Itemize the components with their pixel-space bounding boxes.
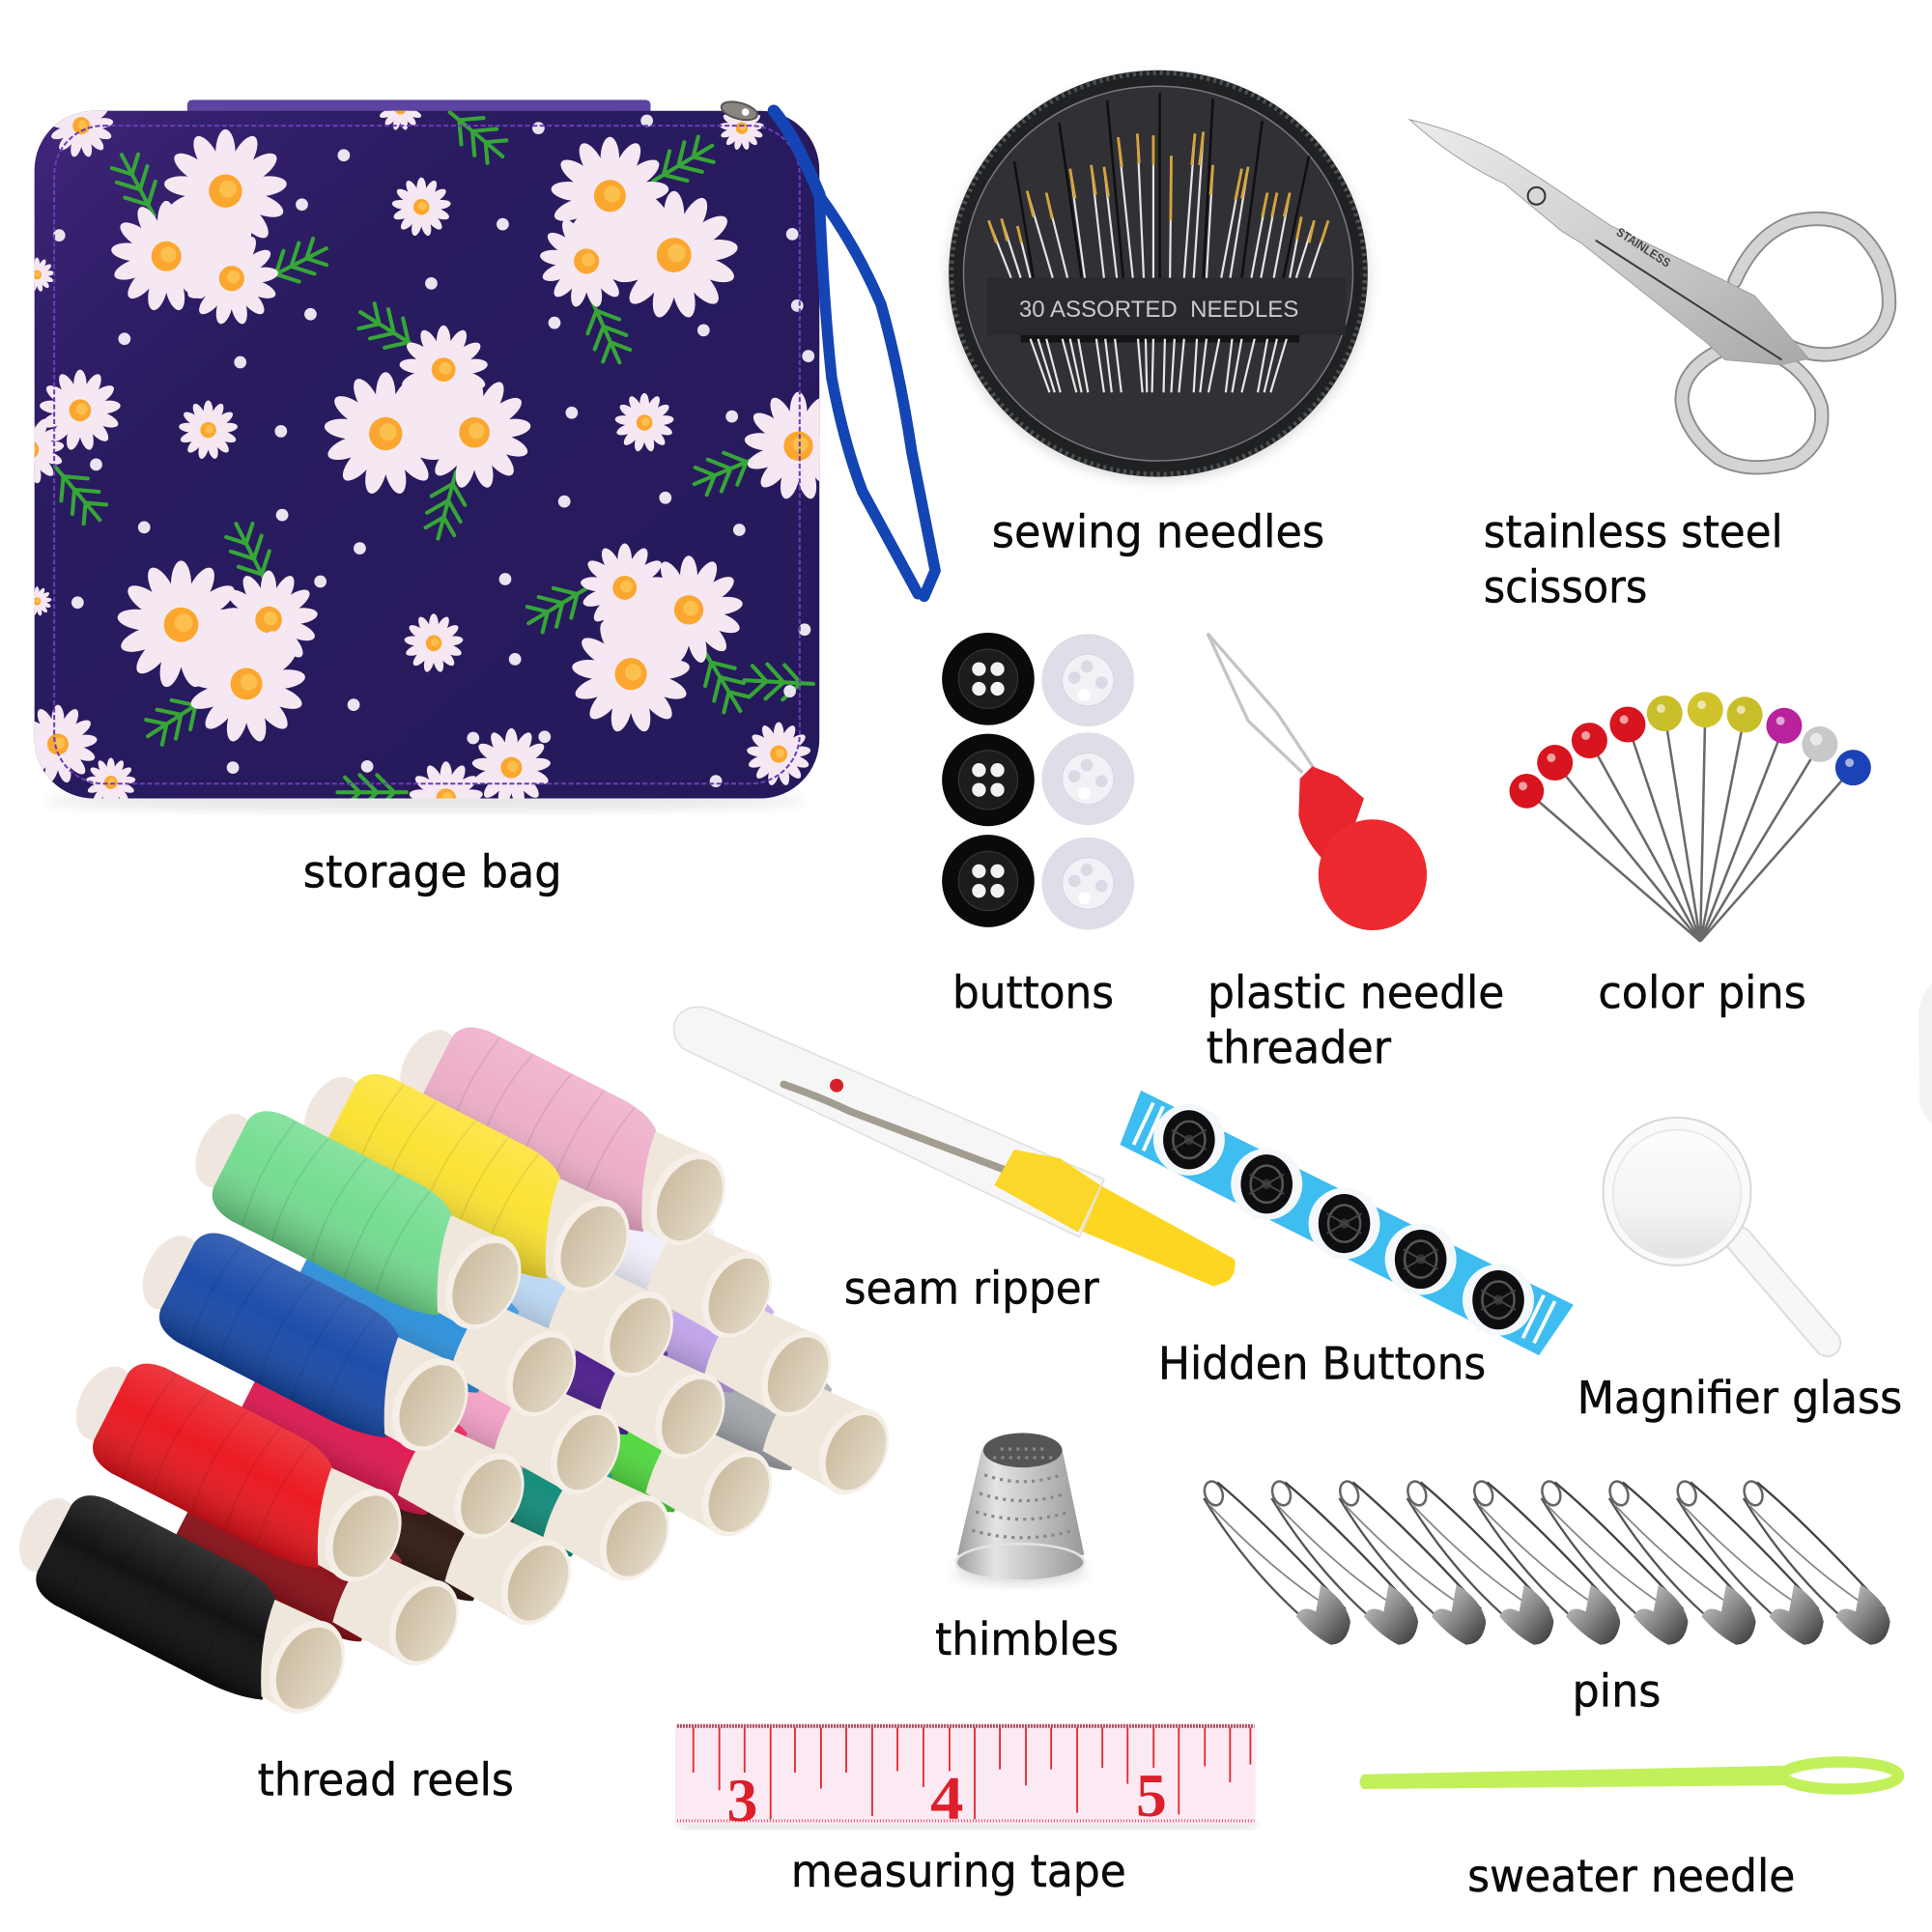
label: plastic needle threader (1207, 966, 1504, 1074)
floral print (35, 110, 819, 798)
reel: black (0, 1471, 364, 1736)
scissor rings (1682, 218, 1889, 468)
needles (986, 93, 1346, 392)
label: sewing needles: sewing needles (992, 505, 1324, 557)
label: stainless steel scissors: scissors (1484, 561, 1647, 613)
tape numbers: 4 (930, 1764, 963, 1833)
reel: dark red (167, 1457, 476, 1685)
needle eye (1783, 1762, 1899, 1789)
label: thread reels: thread reels (258, 1753, 514, 1805)
label: stainless steel scissors (1484, 505, 1783, 613)
disc inner face (963, 86, 1353, 461)
panel: magnifier glass (1603, 1118, 1828, 1343)
thimble dimples (972, 1449, 1073, 1538)
zipper pull (720, 99, 759, 124)
label: seam ripper: seam ripper (844, 1262, 1099, 1314)
magnifier lens (1603, 1118, 1750, 1265)
threader wire (1208, 634, 1314, 773)
reel: white (480, 1129, 789, 1357)
clear tube (674, 1008, 1104, 1237)
label: plastic needle threader: threader (1207, 1022, 1391, 1074)
thimble rim (956, 1544, 1084, 1580)
scissor blades and shanks (1409, 120, 1808, 365)
panel: buttons (942, 633, 1134, 929)
label: stainless steel scissors: stainless steel (1484, 505, 1783, 557)
panel: hidden buttons strip (1120, 1091, 1574, 1355)
label: buttons: buttons (952, 966, 1114, 1018)
pin shafts (1526, 710, 1853, 941)
panel: thread reels (0, 1003, 906, 1736)
disc printed text: 30 ASSORTED NEEDLES (1019, 297, 1298, 323)
reel: crimson (233, 1330, 542, 1558)
panel: seam ripper (674, 1008, 1236, 1287)
tape numbers (727, 1761, 1167, 1834)
panel: stainless steel scissors (1409, 120, 1889, 468)
back flap (187, 99, 650, 129)
engraved text: STAINLESS (1614, 224, 1673, 270)
reel: sky blue (284, 1208, 593, 1435)
reel: yellow (284, 1050, 649, 1314)
tape numbers: 3 (727, 1766, 757, 1834)
stitching (54, 126, 800, 783)
threader round grip (1319, 819, 1427, 930)
ripper red tip (830, 1079, 843, 1093)
label: color pins: color pins (1598, 966, 1806, 1018)
thimble body (957, 1449, 1084, 1555)
pin heads (1509, 692, 1871, 809)
reel: light purple (539, 1208, 848, 1435)
reel: red (56, 1339, 421, 1604)
label: magnifier glass: Magnifier glass (1577, 1372, 1902, 1424)
panel: plastic needle threader (1208, 634, 1427, 930)
label: plastic needle threader: plastic needle (1208, 966, 1504, 1018)
bag body (35, 111, 819, 799)
panel: storage bag label: storage bag (303, 845, 562, 897)
panel: sewing needles disc (948, 71, 1369, 480)
reel: blue (122, 1208, 488, 1473)
reel: gray (597, 1286, 906, 1514)
tape body (675, 1725, 1256, 1825)
panel: measuring tape (675, 1725, 1256, 1834)
reel: pink (380, 1003, 745, 1267)
strip (1120, 1091, 1574, 1355)
label: sweater needle: sweater needle (1467, 1850, 1795, 1902)
label: measuring tape: measuring tape (791, 1845, 1126, 1897)
yellow collar (994, 1150, 1100, 1233)
label: thimbles: thimbles (935, 1613, 1119, 1665)
reel: pale blue (382, 1169, 691, 1396)
reel: teal (378, 1372, 687, 1600)
tape ticks (677, 1726, 1255, 1821)
magnifier handle (1739, 1239, 1828, 1343)
reel: green (175, 1087, 541, 1351)
label: pins: pins (1573, 1665, 1661, 1718)
snap fasteners (1153, 1104, 1534, 1336)
pin head highlights (1519, 700, 1854, 790)
thimble top (983, 1433, 1062, 1467)
panel: storage bag (0, 86, 935, 836)
disc outer ridged rim (949, 71, 1368, 477)
pivot screw (1528, 187, 1545, 205)
blue wrist strap (774, 111, 935, 596)
panel: thimble (953, 1433, 1087, 1584)
reel: dark purple (434, 1250, 743, 1478)
ripper blade (783, 1084, 1007, 1171)
reel: light pink (328, 1286, 638, 1514)
tape numbers: 5 (1136, 1761, 1167, 1830)
threader red handle (1298, 766, 1364, 863)
yellow handle (1078, 1185, 1236, 1287)
panel: safety pins (1202, 1479, 1890, 1645)
reel: brown (279, 1416, 588, 1644)
decorative cropped shape at right edge (1918, 983, 1932, 1123)
reel: lime green (480, 1327, 789, 1555)
strip end stripes (1133, 1103, 1555, 1343)
blade pivot line (1596, 241, 1781, 359)
needle shaft (1360, 1766, 1784, 1789)
panel: color pins (1509, 692, 1871, 941)
label: hidden buttons: Hidden Buttons (1158, 1337, 1486, 1389)
panel: sweater needle (1360, 1762, 1899, 1789)
